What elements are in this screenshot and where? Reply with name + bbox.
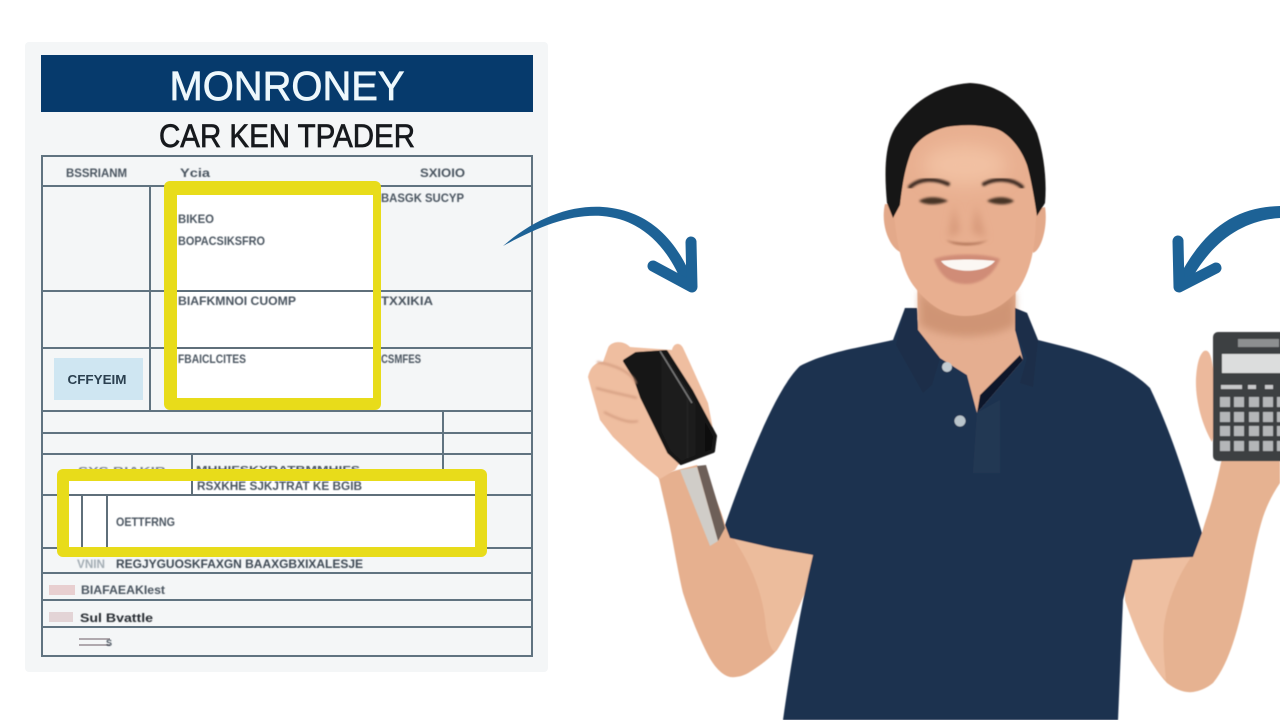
nose bridge shading bbox=[948, 205, 986, 238]
sticker mid row text bbox=[78, 465, 360, 477]
right arm bbox=[1125, 458, 1280, 692]
yellow highlight box: pricing column: BIAFKMNOI CUOMP bbox=[178, 294, 296, 308]
sticker column headings: Ycia bbox=[180, 166, 210, 180]
ears bbox=[884, 204, 1046, 253]
teeth bbox=[941, 260, 995, 271]
face bbox=[893, 120, 1036, 316]
left upper arm light area bbox=[733, 538, 815, 651]
calculator body bbox=[1213, 332, 1280, 461]
sticker right column values bbox=[381, 191, 464, 366]
sticker header band: MONRONEY bbox=[170, 63, 404, 109]
calculator keypad bbox=[1220, 397, 1280, 451]
sticker subtitle: CAR KEN TPADER bbox=[159, 118, 415, 154]
arrow: calculator side bbox=[1176, 206, 1280, 288]
key blade silver bbox=[680, 467, 718, 546]
yellow highlight box: pricing column: FBAICLCITES bbox=[178, 352, 246, 366]
yellow highlight box: offering row: RSXKHE SJKJTRAT KE BGIB bbox=[197, 479, 362, 493]
hair bbox=[886, 83, 1046, 218]
sticker lower rows: S bbox=[106, 638, 112, 648]
neck shadow under chin bbox=[920, 290, 1015, 336]
sticker right column values: TXXIKIA bbox=[381, 294, 433, 308]
icon: hand with key fob bbox=[588, 342, 725, 546]
shirt collar left bbox=[896, 308, 940, 393]
sticker right column values: CSMFES bbox=[381, 352, 421, 366]
shirt bbox=[725, 308, 1202, 720]
head bbox=[884, 83, 1046, 316]
calculator top strip bbox=[1238, 339, 1279, 347]
sticker column headings bbox=[66, 166, 465, 180]
yellow highlight box: offering row: OETTFRNG bbox=[116, 515, 175, 529]
nose shadow bbox=[946, 240, 988, 245]
panel: Monroney sticker bbox=[25, 42, 548, 672]
shirt collar right bbox=[1015, 308, 1038, 387]
inner collar shadow bbox=[977, 355, 1023, 413]
sticker lower rows: BIAFAEAKIest bbox=[81, 583, 165, 597]
calculator function keys bbox=[1221, 385, 1273, 389]
sticker lower rows: REGJYGUOSKFAXGN BAAXGBXIXALESJE bbox=[116, 557, 363, 571]
yellow highlight box: offering row bbox=[57, 469, 487, 557]
key blade dark edge bbox=[697, 465, 725, 541]
yellow highlight box: pricing column bbox=[164, 181, 381, 410]
eyebrows bbox=[910, 180, 1022, 187]
finger creases bbox=[596, 362, 638, 422]
sticker grid lines bbox=[42, 156, 532, 656]
forehead highlight bbox=[923, 145, 1007, 185]
icon: hand with calculator bbox=[1196, 332, 1280, 461]
sticker column headings: BSSRIANM bbox=[66, 166, 127, 180]
sticker mid row text: SYS BIAKIB bbox=[78, 466, 166, 477]
top button bbox=[942, 362, 952, 372]
sticker mid row text: MHHIFSKXRATBMMHIFS bbox=[196, 465, 360, 476]
person bbox=[658, 83, 1280, 720]
fob highlight bbox=[660, 351, 692, 403]
second button bbox=[954, 416, 966, 426]
sticker lower rows: Sul Bvattle bbox=[80, 611, 153, 625]
sticker column headings: SXIOIO bbox=[420, 166, 465, 180]
sticker lower rows: VNIN bbox=[77, 557, 105, 571]
eyes bbox=[919, 197, 1014, 204]
mouth bbox=[934, 254, 1000, 284]
yellow highlight box: pricing column: BIKEO bbox=[178, 212, 214, 226]
sticker right column values: BASGK SUCYP bbox=[381, 191, 464, 205]
blue callout label bbox=[54, 358, 143, 400]
yellow highlight box: pricing column: BOPACSIKSFRO bbox=[178, 234, 265, 248]
sticker header band bbox=[41, 55, 533, 112]
right upper arm light area bbox=[1125, 556, 1192, 680]
thumb bbox=[1196, 351, 1215, 442]
blue callout label: CFFYEIM bbox=[68, 372, 126, 387]
fob body bbox=[625, 352, 715, 463]
sticker lower rows bbox=[49, 557, 363, 648]
calculator screen bbox=[1222, 354, 1280, 373]
shirt placket bbox=[973, 400, 1000, 473]
left arm bbox=[658, 465, 818, 677]
hand behind fob bbox=[588, 342, 715, 479]
neck bbox=[917, 275, 1023, 413]
arrow: sticker to key bbox=[503, 207, 694, 288]
